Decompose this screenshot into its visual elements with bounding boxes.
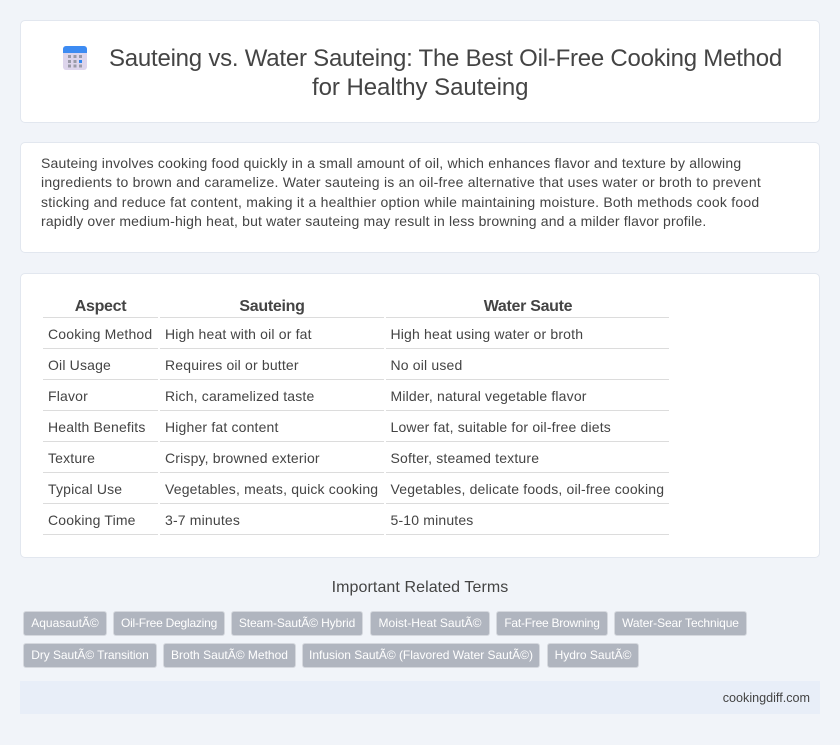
table: comparison: Cooking Method [48,326,152,342]
tags: related terms: Oil-Free Deglazing [121,616,217,630]
table: comparison [43,298,669,535]
table: comparison: Cooking Time [48,512,136,528]
table: comparison: High heat with oil or fat [165,326,312,342]
tags: related terms: Moist-Heat SautÃ© [379,616,481,630]
table: comparison: High heat using water or broth [390,326,583,342]
tags: related terms: Hydro SautÃ© [555,648,631,662]
table: comparison: Flavor [48,388,88,404]
text block: description [41,154,761,229]
table: comparison: Lower fat, suitable for oil-free diets [390,419,611,435]
table: comparison: Crispy, browned exterior [165,450,320,466]
text block: description: rapidly over medium-high heat, but water sauteing may result in less browning and a milder flavor profile. [41,213,706,229]
table: comparison: Rich, caramelized taste [165,388,314,404]
table: comparison: Vegetables, delicate foods, oil-free cooking [390,481,664,497]
tags: related terms: Broth SautÃ© Method [171,648,288,662]
panel: comparison table [20,273,820,558]
title: Sauteing vs. Water Sauteing: The Best Oil-Free Cooking Method [109,45,782,72]
table: comparison: Typical Use [48,481,122,497]
text block: description: sticking and reduce fat content, making it a healthier option while maintaining moisture. Both methods cook food [41,194,759,210]
table: comparison: 5-10 minutes [390,512,473,528]
table: comparison: Texture [48,450,95,466]
panel: description [20,142,820,253]
tags: related terms: Dry SautÃ© Transition [31,648,149,662]
heading: related terms: Important Related Terms [332,579,508,596]
table: comparison: Higher fat content [165,419,279,435]
title [109,45,782,101]
table: comparison: Health Benefits [48,419,146,435]
tags: related terms: Infusion SautÃ© (Flavored Water SautÃ©) [309,648,533,662]
title: for Healthy Sauteing [312,74,528,101]
panel: header [20,20,820,123]
table header: Sauteing: Sauteing [239,298,305,315]
footer credit: cookingdiff.com [723,691,810,705]
table header: Aspect: Aspect [75,298,126,315]
tags: related terms: Fat-Free Browning [504,616,600,630]
table header: Water Saute: Water Saute [484,298,572,315]
icon: calendar [63,46,87,70]
text block: description: ingredients to brown and caramelize. Water sauteing is an oil-free alternative that uses water or broth to prevent [41,174,761,190]
table: comparison: Softer, steamed texture [390,450,539,466]
tags: related terms [23,611,747,668]
text block: description: Sauteing involves cooking food quickly in a small amount of oil, which enhances flavor and texture by allowing [41,154,741,170]
table: comparison: No oil used [390,357,462,373]
tags: related terms: Steam-SautÃ© Hybrid [239,616,355,630]
table: comparison: 3-7 minutes [165,512,240,528]
footer bar [20,681,820,714]
table: comparison: Milder, natural vegetable flavor [390,388,587,404]
tags: related terms: Water-Sear Technique [622,616,739,630]
table: comparison: Oil Usage [48,357,111,373]
table: comparison: Requires oil or butter [165,357,299,373]
table: comparison: Vegetables, meats, quick cooking [165,481,378,497]
tags: related terms: AquasautÃ© [31,616,99,630]
